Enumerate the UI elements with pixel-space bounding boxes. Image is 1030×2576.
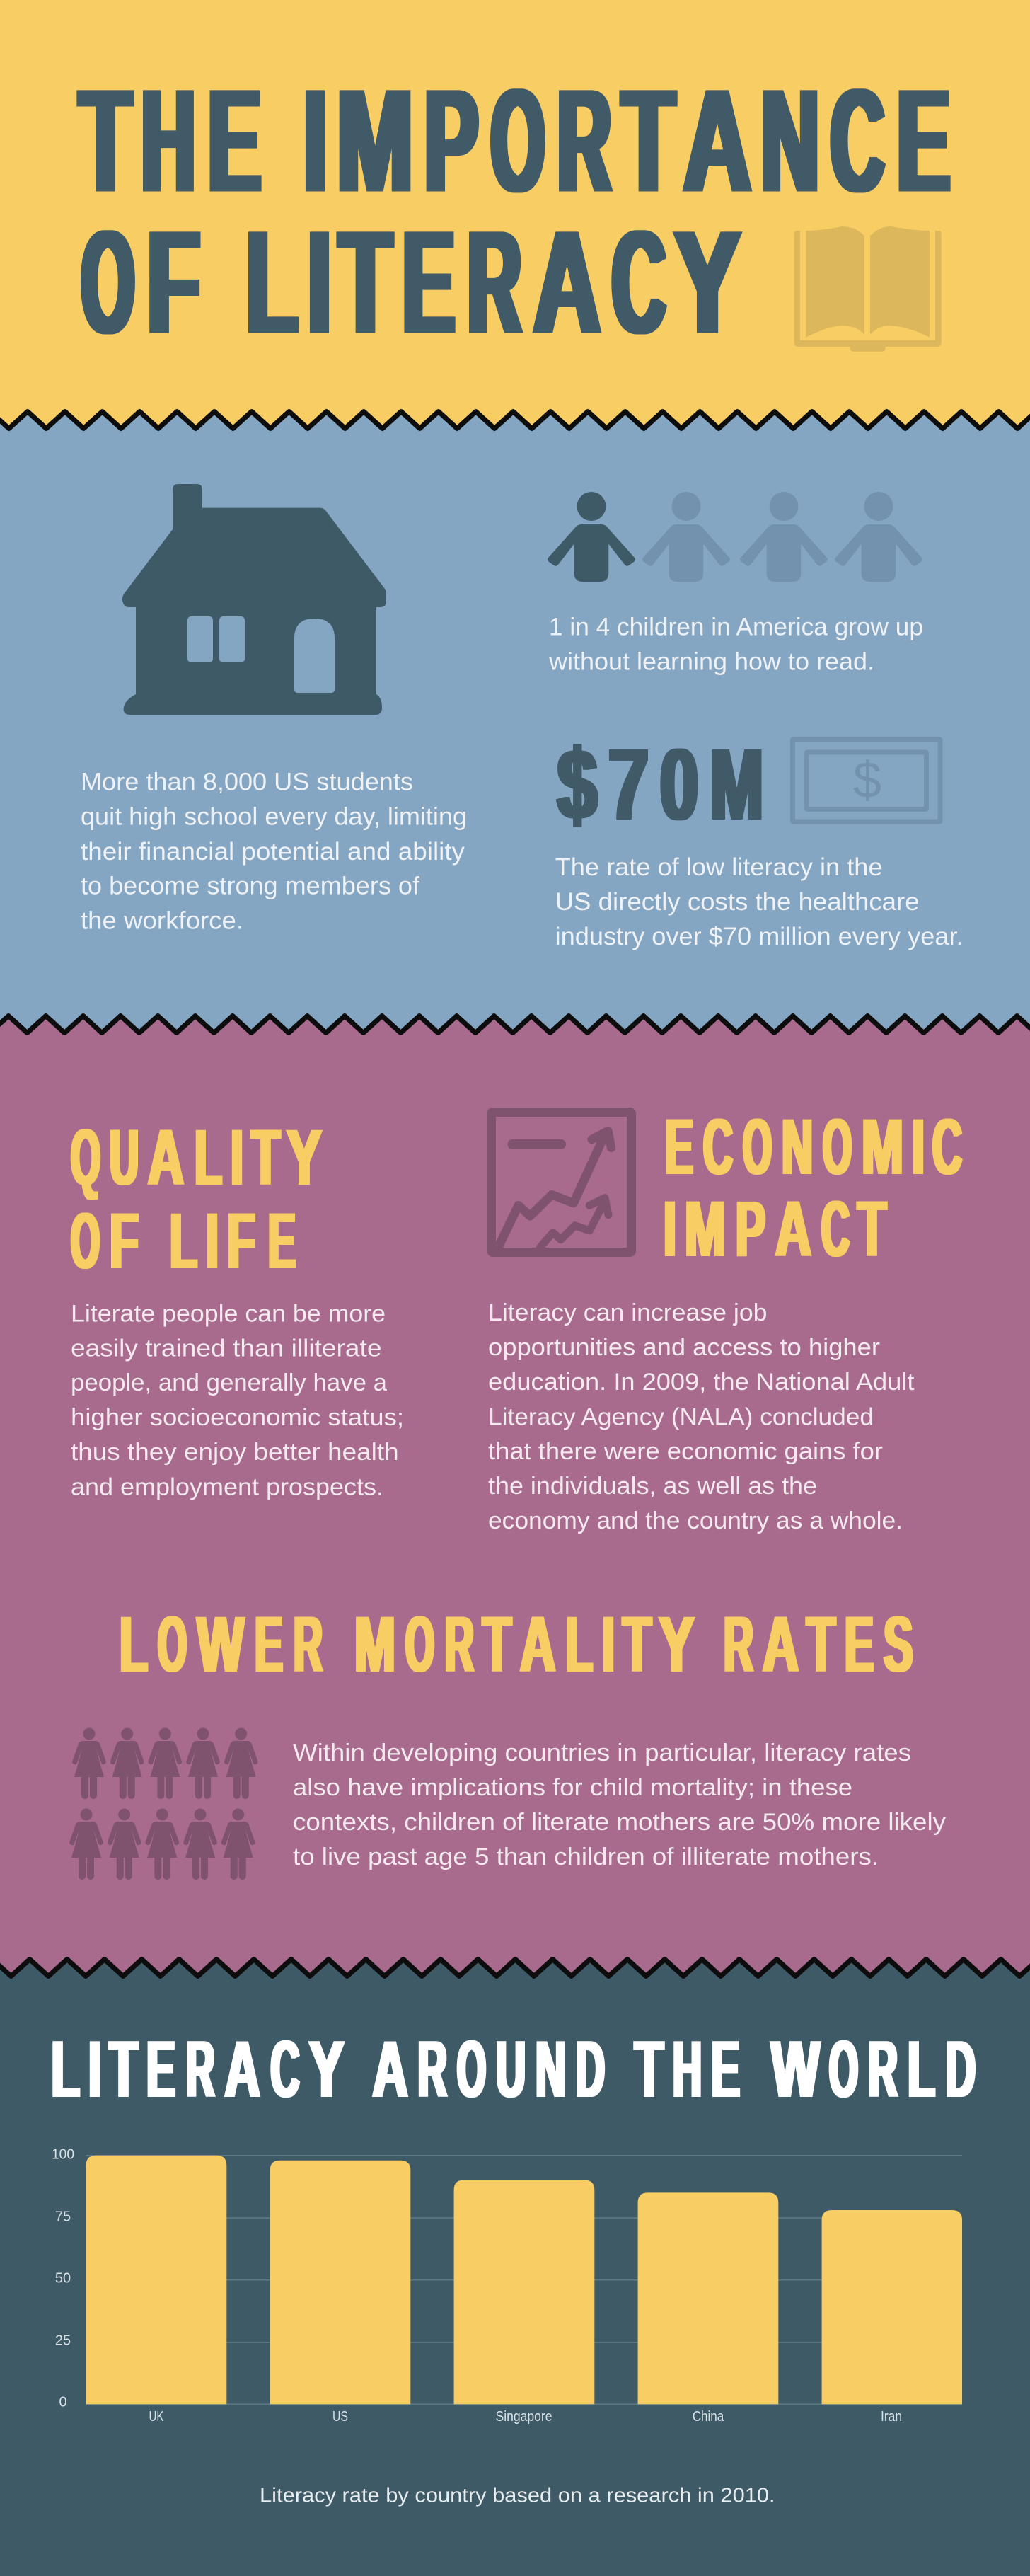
heading: literacy around the world: N	[536, 2025, 566, 2115]
text: quality of life body: people, and generally have a	[71, 1369, 387, 1396]
heading: literacy around the world: R	[869, 2025, 898, 2115]
stat: $70M	[557, 728, 763, 841]
heading: quality of life: O	[71, 1197, 100, 1285]
icon: ten women	[69, 1728, 258, 1880]
stat: $70M: M	[710, 728, 763, 841]
text: quality of life body: higher socioeconomic status;	[71, 1404, 404, 1431]
heading: lower mortality rates: R	[294, 1600, 323, 1689]
text: quality of life body: easily trained than illiterate	[71, 1335, 382, 1362]
heading: economic impact: A	[775, 1185, 811, 1273]
text: quality of life body: and employment prospects.	[71, 1473, 383, 1500]
text: high school dropouts: to become strong members of	[81, 872, 419, 900]
stat: $70M: 7	[608, 728, 649, 841]
heading: quality of life: U	[110, 1113, 139, 1202]
text: quality of life body	[71, 1300, 404, 1500]
heading: literacy around the world: L	[908, 2025, 935, 2115]
y axis labels: 100	[52, 2147, 74, 2163]
x axis labels: UK	[149, 2409, 164, 2425]
text: healthcare cost	[555, 853, 964, 950]
icon: house	[122, 484, 386, 715]
heading: quality of life: F	[227, 1197, 255, 1285]
text: high school dropouts: their financial potential and ability	[81, 838, 465, 866]
heading: lower mortality rates: I	[602, 1600, 615, 1689]
heading: literacy around the world: L	[51, 2025, 80, 2115]
heading: quality of life: I	[231, 1113, 243, 1202]
heading: economic impact: I	[912, 1103, 925, 1191]
panel: literacy around the world	[0, 1959, 1030, 2576]
heading: quality of life: L	[170, 1197, 197, 1285]
title: L	[246, 201, 298, 365]
text: one in four children: 1 in 4 children in America grow up	[549, 614, 923, 641]
icon: open book	[794, 226, 942, 352]
text: child mortality body	[293, 1740, 946, 1870]
heading: economic impact: O	[823, 1103, 852, 1191]
heading: lower mortality rates	[120, 1600, 913, 1689]
icon: four children, one highlighted	[548, 492, 922, 582]
title: E	[897, 59, 950, 224]
title: F	[147, 201, 200, 365]
text: economic impact body: opportunities and access to higher	[488, 1334, 880, 1361]
heading: economic impact: I	[664, 1185, 676, 1273]
heading: lower mortality rates: T	[806, 1600, 835, 1689]
heading: economic impact: C	[932, 1103, 962, 1191]
heading: quality of life: T	[251, 1113, 280, 1202]
heading: lower mortality rates: E	[255, 1600, 283, 1689]
heading: lower mortality rates: O	[405, 1600, 434, 1689]
heading: literacy around the world: O	[829, 2025, 858, 2115]
heading: lower mortality rates: E	[845, 1600, 874, 1689]
heading: literacy around the world: E	[712, 2025, 740, 2115]
text: economic impact body: the individuals, as well as the	[488, 1473, 817, 1500]
heading: literacy around the world: T	[635, 2025, 664, 2115]
heading: quality of life: Q	[71, 1113, 100, 1202]
title: P	[424, 59, 478, 224]
heading: lower mortality rates: W	[197, 1600, 244, 1689]
title: I	[303, 59, 327, 224]
title: R	[468, 201, 521, 365]
icon: banknote	[792, 739, 940, 822]
stat: $70M: 0	[660, 728, 698, 841]
heading: lower mortality rates: S	[884, 1600, 913, 1689]
panel: blue statistics	[0, 412, 1030, 1047]
heading: economic impact: P	[736, 1185, 765, 1273]
heading: lower mortality rates: A	[520, 1600, 556, 1689]
heading: economic impact: C	[703, 1103, 733, 1191]
x axis labels: US	[332, 2409, 348, 2425]
heading: quality of life: L	[195, 1113, 222, 1202]
heading: lower mortality rates: R	[445, 1600, 474, 1689]
heading: lower mortality rates: T	[482, 1600, 511, 1689]
heading: economic impact: N	[782, 1103, 813, 1191]
text: child mortality body: Within developing countries in particular, literacy rates	[293, 1740, 911, 1766]
heading: literacy around the world: D	[946, 2025, 976, 2115]
title: O	[491, 59, 545, 224]
heading: literacy around the world: H	[673, 2025, 702, 2115]
heading: literacy around the world: T	[109, 2025, 138, 2115]
x axis labels	[149, 2409, 902, 2425]
bars	[86, 2156, 962, 2404]
text: high school dropouts	[81, 769, 467, 934]
title: I	[308, 201, 331, 365]
heading: economic impact: C	[821, 1185, 850, 1273]
title: E	[403, 201, 455, 365]
heading: lower mortality rates: R	[724, 1600, 753, 1689]
heading: quality of life: Y	[287, 1113, 322, 1202]
heading: literacy around the world: R	[417, 2025, 447, 2115]
title: T	[79, 59, 132, 224]
text: child mortality body: to live past age 5 than children of illiterate mothers.	[293, 1844, 879, 1870]
panel: header	[0, 0, 1030, 439]
y axis labels: 50	[55, 2270, 71, 2286]
heading: lower mortality rates: Y	[659, 1600, 694, 1689]
y axis labels: 25	[55, 2333, 71, 2348]
text: economic impact body: that there were economic gains for	[488, 1438, 883, 1465]
heading: literacy around the world: Y	[308, 2025, 344, 2115]
heading: lower mortality rates: T	[623, 1600, 652, 1689]
heading: quality of life: A	[148, 1113, 184, 1202]
heading: literacy around the world: E	[146, 2025, 175, 2115]
heading: lower mortality rates: M	[354, 1600, 395, 1689]
heading: literacy around the world: O	[457, 2025, 486, 2115]
heading: literacy around the world: W	[771, 2025, 820, 2115]
heading: quality of life: I	[206, 1197, 219, 1285]
text: quality of life body: thus they enjoy better health	[71, 1439, 399, 1466]
heading: economic impact: M	[862, 1103, 903, 1191]
heading: quality of life: F	[110, 1197, 139, 1285]
panel: purple benefits	[0, 1016, 1030, 1989]
text: child mortality body: also have implications for child mortality; in these	[293, 1774, 852, 1801]
title: A	[533, 201, 601, 365]
title: T	[339, 201, 392, 365]
text: child mortality body: contexts, children of literate mothers are 50% more likely	[293, 1809, 946, 1836]
heading: literacy around the world: I	[88, 2025, 101, 2115]
heading: literacy around the world: D	[576, 2025, 605, 2115]
title: N	[761, 59, 819, 224]
title: R	[557, 59, 611, 224]
heading: lower mortality rates: O	[158, 1600, 187, 1689]
text: high school dropouts: quit high school every day, limiting	[81, 803, 467, 831]
x axis labels: China	[693, 2409, 724, 2425]
x axis labels: Iran	[881, 2409, 902, 2425]
text: high school dropouts: the workforce.	[81, 907, 243, 934]
heading: economic impact: O	[743, 1103, 772, 1191]
heading: economic impact: E	[665, 1103, 693, 1191]
text: quality of life body: Literate people can be more	[71, 1300, 386, 1327]
icon: growth chart	[491, 1112, 631, 1253]
heading: economic impact: T	[857, 1185, 886, 1273]
title: T	[622, 59, 675, 224]
heading: literacy around the world: U	[496, 2025, 526, 2115]
heading: lower mortality rates: L	[566, 1600, 593, 1689]
text: high school dropouts: More than 8,000 US students	[81, 769, 413, 795]
text: economic impact body	[488, 1299, 915, 1534]
heading: lower mortality rates: L	[120, 1600, 148, 1689]
heading: literacy around the world: C	[270, 2025, 300, 2115]
x axis labels: Singapore	[495, 2409, 552, 2425]
text: one in four children	[548, 614, 923, 676]
title	[79, 59, 950, 365]
title: Y	[674, 201, 741, 365]
text: healthcare cost: US directly costs the healthcare	[555, 888, 920, 916]
heading: literacy around the world: R	[186, 2025, 215, 2115]
text: economic impact body: education. In 2009, the National Adult	[488, 1369, 915, 1396]
heading: literacy around the world	[51, 2025, 976, 2115]
title: M	[337, 59, 413, 224]
text: one in four children: without learning how to read.	[548, 648, 874, 676]
text: economic impact body: Literacy can increase job	[488, 1299, 767, 1326]
bar chart: literacy rate by country	[52, 2147, 962, 2425]
y axis labels: 0	[59, 2395, 67, 2410]
text: economic impact body: Literacy Agency (NALA) concluded	[488, 1403, 874, 1430]
text: healthcare cost: The rate of low literacy in the	[555, 853, 883, 881]
heading: economic impact	[664, 1103, 962, 1273]
title: H	[141, 59, 195, 224]
text: economic impact body: economy and the country as a whole.	[488, 1507, 903, 1534]
title: E	[208, 59, 261, 224]
title: C	[612, 201, 666, 365]
y axis labels	[52, 2147, 74, 2410]
heading: lower mortality rates: A	[763, 1600, 799, 1689]
heading: quality of life: E	[268, 1197, 296, 1285]
title: O	[81, 201, 134, 365]
stat: $70M: $	[557, 728, 597, 841]
title: C	[831, 59, 884, 224]
title: A	[683, 59, 751, 224]
text: healthcare cost: industry over $70 million every year.	[555, 923, 964, 950]
text: chart caption: Literacy rate by country based on a research in 2010.	[260, 2484, 775, 2507]
icon: banknote: $	[853, 752, 881, 809]
y axis labels: 75	[55, 2209, 71, 2224]
heading: literacy around the world: A	[372, 2025, 408, 2115]
heading: literacy around the world: A	[225, 2025, 260, 2115]
heading: economic impact: M	[685, 1185, 726, 1273]
heading: quality of life	[71, 1113, 322, 1285]
